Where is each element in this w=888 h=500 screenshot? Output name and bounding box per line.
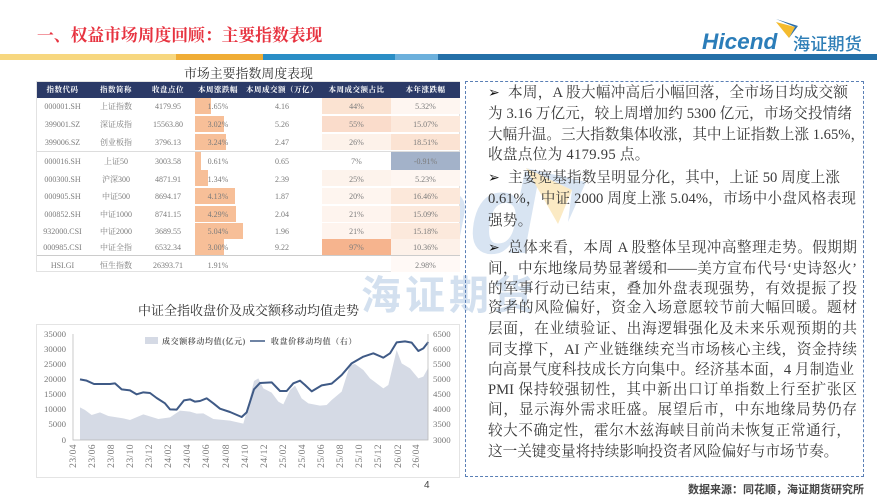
paragraph 1: 收盘点位为 4179.95 点。 [488, 147, 650, 163]
x axis date labels: 24/02 [163, 444, 174, 468]
row: 中证全指: 6532.34 [155, 243, 181, 252]
table header row: 本周成交额（万亿） [246, 85, 318, 94]
paragraph 3: 层面，在业绩验证、出海逻辑强化及未来乐观预期的共 [488, 321, 857, 337]
left axis labels [44, 329, 67, 445]
row: 深证成指: 5.26 [275, 120, 289, 129]
x axis date labels: 24/12 [259, 444, 270, 468]
x axis date labels: 26/02 [393, 444, 404, 468]
x axis date labels: 23/10 [125, 444, 136, 468]
row: 上证指数: 上证指数 [100, 102, 132, 111]
row: 中证全指 [43, 239, 460, 255]
legend: 收盘价移动均值（右） [271, 336, 357, 346]
left axis labels: 20000 [44, 374, 67, 384]
row: 深证成指: 深证成指 [100, 120, 132, 129]
x axis date labels: 23/12 [144, 444, 155, 468]
source note: 数据来源：同花顺，海证期货研究所 [688, 481, 864, 497]
row: 上证50: 0.65 [275, 157, 289, 166]
row: 上证指数: 5.32% [415, 102, 436, 111]
table heading: 市场主要指数周度表现 [184, 67, 313, 81]
row: 沪深300: 4871.91 [155, 175, 181, 184]
row: 深证成指: 15.07% [413, 120, 438, 129]
watermark: Hicend logo: nd [401, 152, 538, 277]
left axis labels: 0 [62, 435, 67, 445]
row: 上证指数: 4.16 [275, 102, 289, 111]
row: 沪深300: 沪深300 [102, 175, 130, 184]
row: 上证50: 7% [351, 157, 362, 166]
left axis labels: 30000 [44, 344, 67, 354]
row: 中证全指: 10.36% [413, 243, 438, 252]
paragraph 3: 的军事行动已结束，叠加外盘表现强势，有效提振了投 [488, 281, 857, 297]
right axis labels: 3000 [433, 435, 451, 445]
row: 中证1000: 2.04 [275, 210, 289, 219]
paragraph 1: ➢ [488, 85, 500, 101]
paragraph 3: 向高景气度科技成长方向集中。经济基本面，4 月制造业 [488, 362, 854, 378]
row: 创业板指: 2.47 [275, 138, 289, 147]
legend: 成交额移动均值(亿元) [162, 336, 246, 346]
right axis labels [433, 329, 451, 445]
paragraph 1: 为 3.16 万亿元，较上周增加约 5300 亿元，市场交投情绪 [488, 106, 852, 122]
row: 沪深300: 5.23% [415, 175, 436, 184]
x axis date labels: 25/08 [335, 444, 346, 468]
row: 恒生指数: HSI.GI [51, 261, 74, 270]
header colour band [0, 54, 877, 60]
row: 中证500: 4.13% [208, 192, 228, 201]
paragraph 3 [488, 239, 857, 460]
right axis labels: 4500 [433, 389, 451, 399]
row: 中证1000 [44, 206, 460, 222]
x axis date labels: 25/10 [354, 444, 365, 468]
row: 中证2000 [43, 223, 460, 239]
row: 创业板指: 创业板指 [100, 138, 132, 147]
paragraph 2: 主要宽基指数呈明显分化，其中，上证 50 周度上涨 [508, 170, 840, 186]
row: 中证1000: 000852.SH [44, 210, 81, 219]
row: 深证成指 [45, 116, 460, 132]
right axis labels: 3500 [433, 419, 451, 429]
table header row: 指数代码 [46, 85, 78, 94]
row: 中证2000: 15.18% [413, 227, 438, 236]
x axis date labels: 24/04 [182, 444, 193, 468]
row: 沪深300: 000300.SH [44, 175, 81, 184]
row: 深证成指: 399001.SZ [45, 120, 80, 129]
x axis date labels: 24/10 [240, 444, 251, 468]
row: 中证500: 1.87 [275, 192, 289, 201]
axes [73, 334, 428, 440]
row: 中证1000: 8741.15 [155, 210, 181, 219]
paragraph 3: 资者的风险偏好，资金入场意愿较节前大幅回暖。题材 [488, 300, 857, 316]
table header row: 指数简称 [100, 85, 132, 94]
row: 创业板指: 26% [349, 138, 364, 147]
row: 深证成指: 15563.80 [153, 120, 183, 129]
row: 上证50: 000016.SH [44, 157, 81, 166]
left axis labels: 5000 [48, 419, 67, 429]
row: 中证全指: 中证全指 [100, 243, 132, 252]
row: 上证指数 [44, 98, 460, 114]
x axis date labels: 23/06 [87, 444, 98, 468]
row: 中证全指: 000985.CSI [43, 243, 82, 252]
row: 中证500: 16.46% [413, 192, 438, 201]
x axis date labels: 24/06 [201, 444, 212, 468]
row: 创业板指: 18.51% [413, 138, 438, 147]
logo: Hicend [702, 19, 862, 55]
table header row: 本年涨跌幅 [406, 85, 446, 94]
paragraph 3: 同支撑下，AI 产业链继续充当市场核心主线，资金持续 [488, 342, 857, 358]
row: 中证2000: 21% [349, 227, 364, 236]
chart heading: 中证全指收盘价及成交额移动均值走势 [138, 303, 359, 318]
right axis labels: 6500 [433, 329, 451, 339]
x axis date labels: 24/08 [221, 444, 232, 468]
paragraph 3: ➢ [488, 240, 500, 256]
commentary panel [465, 81, 864, 477]
row: 恒生指数: 26393.71 [153, 261, 183, 270]
row: 深证成指: 3.02% [208, 120, 228, 129]
chart: CSI All Share close and turnover moving average [36, 324, 460, 478]
row: 中证2000: 3689.55 [155, 227, 181, 236]
watermark: logo triangle [526, 168, 586, 224]
row: 中证全指: 3.00% [208, 243, 228, 252]
row: 恒生指数: 恒生指数 [100, 261, 132, 270]
row: 中证1000: 中证1000 [100, 210, 132, 219]
row: 中证2000: 5.04% [208, 227, 228, 236]
right axis labels: 5000 [433, 374, 451, 384]
turnover area series [80, 350, 428, 440]
left axis labels: 25000 [44, 359, 67, 369]
paragraph 2: 0.61%，中证 2000 周度上涨 5.04%，市场中小盘风格表现 [488, 191, 856, 207]
row: 深证成指: 55% [349, 120, 364, 129]
table header row: 本周涨跌幅 [198, 85, 238, 94]
row: 上证指数: 1.65% [208, 102, 228, 111]
logo icon [776, 19, 798, 38]
table header row: 收盘点位 [152, 85, 184, 94]
row: 中证1000: 21% [349, 210, 364, 219]
paragraph 3: 总体来看，本周 A 股整体呈现冲高整理走势。假期期 [508, 240, 857, 256]
row: 上证50: 上证50 [104, 157, 128, 166]
paragraph 2 [488, 169, 856, 229]
paragraph 1: 本周，A 股大幅冲高后小幅回落，全市场日均成交额 [508, 85, 848, 101]
paragraph 3: 间，显示海外需求旺盛。展望后市，中东地缘局势仍存 [488, 402, 857, 418]
row: 中证500: 8694.17 [155, 192, 181, 201]
x axis date labels: 25/12 [373, 444, 384, 468]
row: 上证指数: 000001.SH [44, 102, 81, 111]
row: 上证指数: 44% [349, 102, 364, 111]
x axis date labels: 23/08 [106, 444, 117, 468]
left axis labels: 15000 [44, 389, 67, 399]
row: 中证1000: 4.29% [208, 210, 228, 219]
x axis date labels: 26/04 [411, 444, 422, 468]
row: 沪深300: 1.34% [208, 175, 228, 184]
row: 上证50: 3003.58 [155, 157, 181, 166]
right axis labels: 6000 [433, 344, 451, 354]
table header row [37, 82, 460, 98]
row: 中证500: 20% [349, 192, 364, 201]
row: 创业板指: 399006.SZ [45, 138, 80, 147]
x axis date labels [68, 444, 422, 468]
row: 恒生指数: 2.98% [415, 261, 436, 270]
left axis labels: 35000 [44, 329, 67, 339]
row: 中证全指: 97% [349, 243, 364, 252]
row: 沪深300: 2.39 [275, 175, 289, 184]
page number: 4 [424, 480, 430, 491]
right axis labels: 5500 [433, 359, 451, 369]
x axis date labels: 25/02 [278, 444, 289, 468]
paragraph 2: 强势。 [488, 213, 533, 229]
watermark: company name: 海证期货 [361, 263, 537, 321]
paragraph 2: ➢ [488, 170, 500, 186]
row: 恒生指数: 1.91% [208, 261, 228, 270]
logo wordmark: Hicend [702, 29, 777, 54]
row: 创业板指 [45, 134, 460, 150]
row: 中证2000: 1.96 [275, 227, 289, 236]
logo Chinese name: 海证期货 [793, 30, 862, 55]
closing price line series [80, 341, 428, 417]
table: index weekly performance [36, 81, 460, 272]
row: 沪深300: 25% [349, 175, 364, 184]
row: 中证500 [44, 188, 460, 204]
title: 一、权益市场周度回顾：主要指数表现 [37, 22, 322, 46]
x axis date labels: 25/04 [297, 444, 308, 468]
row: 上证50: -0.91% [414, 157, 437, 166]
row: 恒生指数 [37, 255, 460, 272]
right axis labels: 4000 [433, 404, 451, 414]
row: 中证2000: 中证2000 [100, 227, 132, 236]
legend [145, 336, 357, 346]
row: 上证50: 0.61% [208, 157, 228, 166]
row: 中证全指: 9.22 [275, 243, 289, 252]
table header row: 本周成交额占比 [328, 85, 384, 94]
row: 创业板指: 3.24% [208, 138, 228, 147]
row: 创业板指: 3796.13 [155, 138, 181, 147]
row: 中证2000: 932000.CSI [43, 227, 82, 236]
paragraph 3: PMI 保持较强韧性，其中新出口订单指数上行至扩张区 [488, 382, 857, 398]
row: 上证50 [37, 151, 460, 170]
row: 沪深300 [44, 170, 460, 186]
left axis labels: 10000 [44, 404, 67, 414]
paragraph 1 [488, 84, 865, 163]
paragraph 3: 较大不确定性，霍尔木兹海峡目前尚未恢复正常通行， [488, 423, 851, 439]
paragraph 3: 间，中东地缘局势显著缓和——美方宣布代号‘史诗怒火’ [488, 261, 857, 277]
x axis date labels: 23/04 [68, 444, 79, 468]
row: 上证指数: 4179.95 [155, 102, 181, 111]
paragraph 3: 这一关键变量将持续影响投资者风险偏好与市场节奏。 [488, 444, 838, 460]
row: 中证1000: 15.09% [413, 210, 438, 219]
x axis date labels: 25/06 [316, 444, 327, 468]
paragraph 1: 大幅升温。三大指数集体收涨，其中上证指数上涨 1.65%， [488, 127, 865, 143]
row: 中证500: 中证500 [102, 192, 130, 201]
row: 中证500: 000905.SH [44, 192, 81, 201]
